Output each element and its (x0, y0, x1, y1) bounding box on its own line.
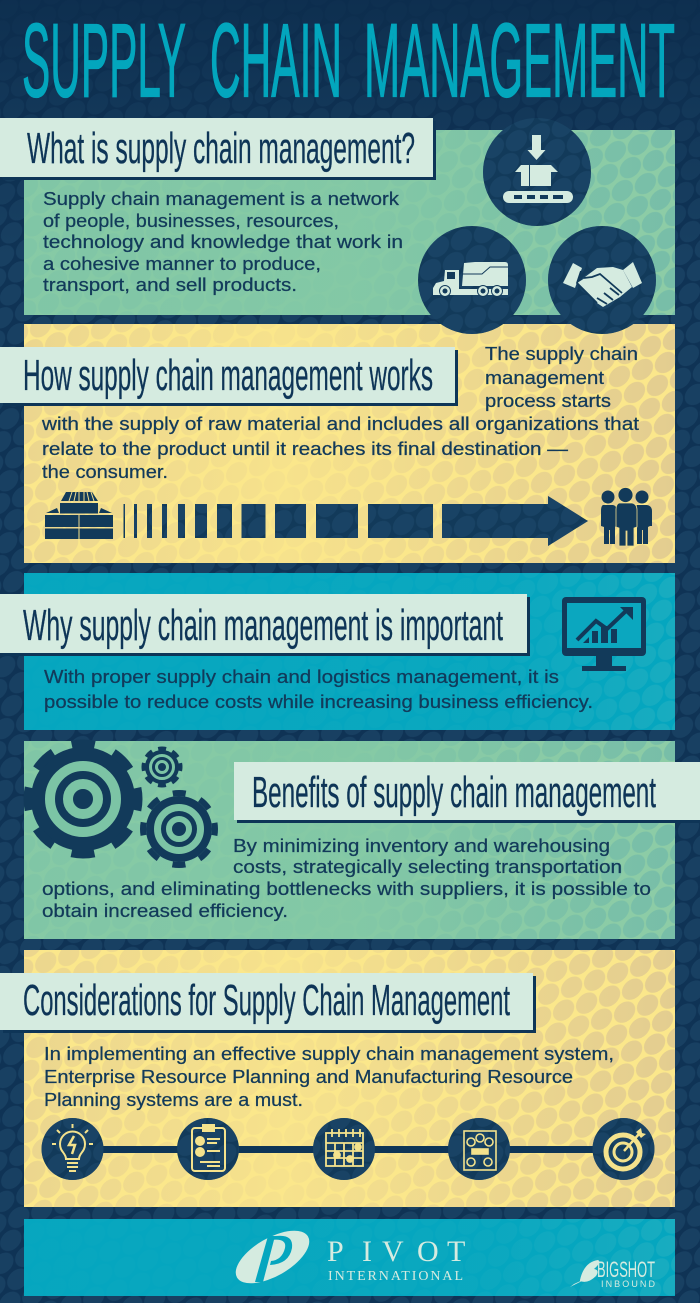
body text (44, 1044, 614, 1110)
icon: small gear (144, 748, 180, 786)
body text: The supply chain (485, 344, 638, 364)
body text: With proper supply chain and logistics management, it is (44, 667, 559, 687)
body text (41, 344, 639, 482)
title: SUPPLY (22, 2, 186, 120)
body text: technology and knowledge that work in (43, 232, 403, 252)
panel: how supply chain management works (0, 324, 675, 563)
heading banner (0, 118, 436, 180)
body text (43, 189, 403, 295)
panel: what is supply chain management (0, 118, 675, 315)
icon: monitor with growth chart (562, 597, 646, 671)
icon: planning chart (448, 1118, 510, 1180)
body text: In implementing an effective supply chain management system, (44, 1044, 614, 1064)
body text: relate to the product until it reaches its final destination — (42, 439, 568, 459)
icon circle: truck (418, 226, 526, 334)
body text: management (485, 368, 604, 388)
body text: options, and eliminating bottlenecks with suppliers, it is possible to (42, 879, 651, 899)
icon: checklist (177, 1118, 239, 1180)
arrow: supply flow (124, 496, 588, 546)
icon: light bulb (42, 1118, 104, 1180)
logo: Pivot International wordmark: INTERNATIONAL (328, 1269, 463, 1284)
body text: of people, businesses, resources, (43, 211, 339, 231)
timeline connector (72, 1146, 624, 1153)
body text: with the supply of raw material and includes all organizations that (41, 414, 639, 434)
body text: Planning systems are a must. (44, 1090, 303, 1110)
logo: Bigshot Inbound (570, 1257, 656, 1289)
logo: Bigshot Inbound: INBOUND (601, 1279, 656, 1289)
body text: transport, and sell products. (43, 275, 297, 295)
body text: By minimizing inventory and warehousing (233, 836, 610, 856)
body text: obtain increased efficiency. (42, 901, 288, 921)
body text: a cohesive manner to produce, (43, 254, 321, 274)
icon: calendar (313, 1118, 375, 1180)
panel: footer (24, 1219, 675, 1296)
icon: medium gear (143, 793, 215, 865)
panel: considerations (0, 950, 675, 1207)
body text: process starts (485, 391, 611, 411)
title (22, 2, 675, 120)
heading banner (0, 973, 536, 1033)
title: CHAIN (210, 2, 342, 120)
body text (42, 836, 651, 921)
icon circle: handshake (548, 226, 656, 334)
panel: why supply chain management is important (0, 573, 675, 730)
body text: Supply chain management is a network (43, 189, 400, 209)
logo: Pivot P mark (227, 1220, 318, 1294)
body text: possible to reduce costs while increasing business efficiency. (44, 692, 593, 712)
logo: Bigshot Inbound: BIGSHOT (597, 1257, 655, 1282)
icon circle: conveyor box (483, 118, 591, 226)
body text (44, 667, 593, 712)
panel: benefits of supply chain management (24, 741, 700, 939)
icon: raw material bricks (45, 492, 113, 539)
body text: Enterprise Resource Planning and Manufacturing Resource (44, 1067, 573, 1087)
icon: consumers (601, 488, 652, 546)
icon: target (592, 1118, 654, 1180)
body text: costs, strategically selecting transportation (233, 857, 622, 877)
heading banner (0, 347, 458, 406)
heading banner (0, 594, 530, 656)
body text: the consumer. (42, 462, 168, 482)
icon: large gear (28, 744, 138, 854)
logo: Pivot International wordmark (327, 1235, 465, 1284)
logo: Pivot International wordmark: PIVOT (327, 1235, 465, 1268)
